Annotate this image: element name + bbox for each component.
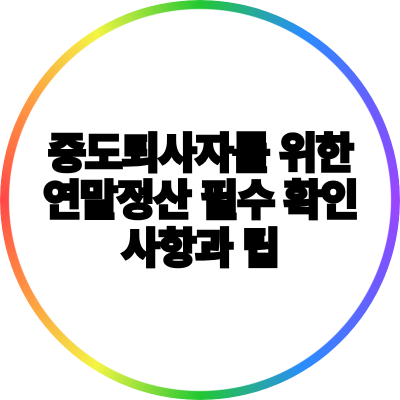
title: 중도퇴사자를 위한 xyxy=(48,130,352,177)
title: 사항과 팁 xyxy=(121,225,279,272)
title: 연말정산 필수 확인 xyxy=(43,177,357,224)
